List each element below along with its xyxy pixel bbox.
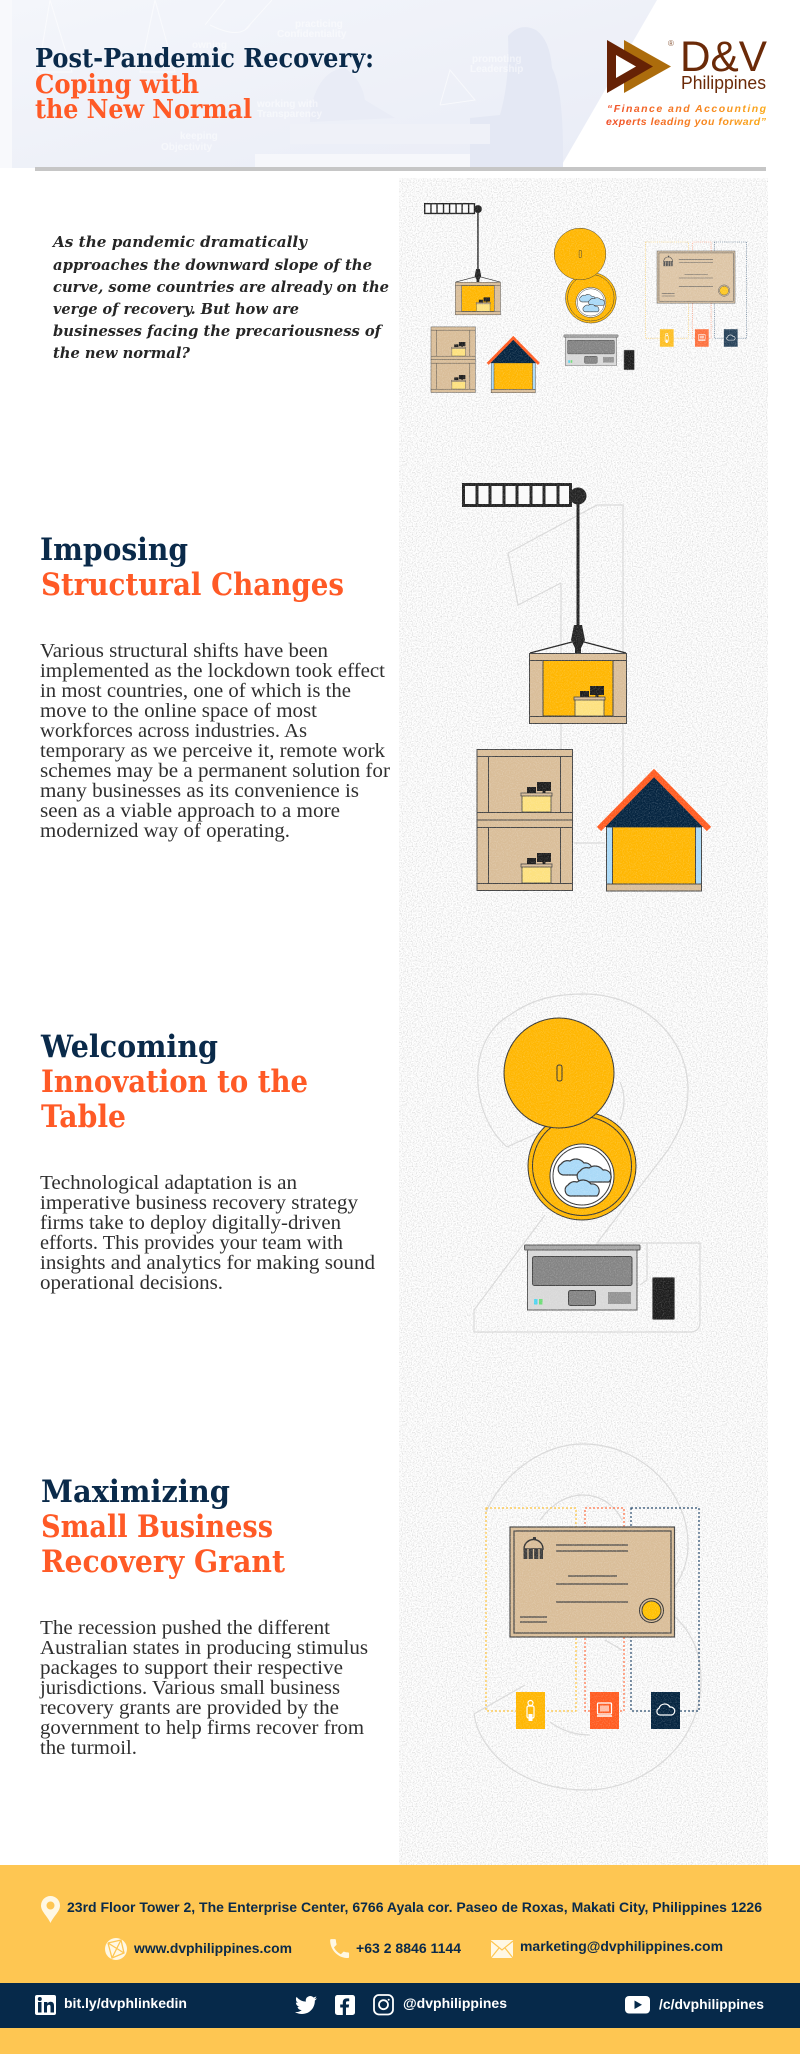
text block: recovery grant: government to help firms recover from [40, 1717, 364, 1739]
header background: Leadership [470, 64, 523, 75]
text block: innovation: imperative business recovery strategy [40, 1192, 358, 1214]
header background: keeping [180, 131, 218, 142]
icon: phone handset [330, 1939, 349, 1958]
ghost numeral 3 [474, 1444, 701, 1790]
footer website [105, 1938, 292, 1960]
heading: maximizing recovery grant: Small Business [41, 1509, 273, 1545]
text block: structural changes: temporary as we perceive it, remote work [40, 740, 385, 762]
heading: maximizing recovery grant [41, 1474, 286, 1580]
text block: structural changes: Various structural shifts have been [40, 640, 328, 662]
title [35, 44, 374, 125]
icon: instagram [374, 1995, 393, 2014]
heading: welcoming innovation: Welcoming [40, 1029, 218, 1065]
heading: imposing structural changes: Imposing [40, 532, 188, 568]
house [599, 773, 709, 891]
icon: location pin [41, 1896, 60, 1923]
header background: Objectivity [161, 142, 213, 153]
text block: structural changes: many businesses as its convenience is [40, 780, 359, 802]
intro text: the new normal? [53, 345, 190, 362]
heading: maximizing recovery grant: Recovery Grant [41, 1544, 286, 1580]
instagram: @dvphilippines [403, 1996, 507, 2011]
grain overlay on illustrations [399, 178, 768, 1865]
text block: recovery grant: packages to support their respective [40, 1657, 343, 1679]
icon: cloud tile [651, 1692, 680, 1729]
icon: linkedin [35, 1995, 56, 2015]
stacked office boxes [477, 750, 572, 890]
vault door open [504, 1018, 636, 1220]
text block: recovery grant [39, 1617, 368, 1759]
intro text: curve, some countries are already on the [53, 279, 389, 296]
text block: structural changes: implemented as the lockdown took effect [40, 660, 385, 682]
intro thumbnail: grant certificate [646, 242, 747, 347]
intro text: As the pandemic dramatically [51, 234, 309, 251]
footer address: 23rd Floor Tower 2, The Enterprise Center, 6766 Ayala cor. Paseo de Roxas, Makati City, Philippines 1226 [67, 1900, 762, 1915]
laptop [524, 1245, 640, 1310]
footer band [0, 1865, 800, 2054]
text block: structural changes: modernized way of operating. [40, 820, 290, 842]
linkedin [35, 1995, 187, 2015]
header background: promoting [472, 54, 521, 65]
text block: structural changes: move to the online space of most [40, 700, 317, 722]
text block: recovery grant: Australian states in producing stimulus [40, 1637, 368, 1659]
dashed link: navy [631, 1508, 699, 1711]
text block: structural changes: workforces across industries. As [40, 720, 307, 742]
text block: recovery grant: the turmoil. [40, 1737, 137, 1759]
dashed link: yellow [486, 1508, 576, 1711]
heading: welcoming innovation: Innovation to the [41, 1064, 308, 1100]
logo: D&V Philippines: ® [668, 39, 674, 48]
icon: globe [105, 1938, 127, 1960]
text block: innovation [40, 1172, 375, 1294]
icon: youtube [625, 1996, 650, 2014]
divider bar [35, 167, 766, 171]
heading: maximizing recovery grant: Maximizing [41, 1474, 230, 1510]
icon: twitter [295, 1996, 317, 2014]
logo: D&V Philippines: Philippines [681, 72, 766, 93]
ghost numeral 2 [474, 994, 700, 1332]
icon: person tile [516, 1692, 545, 1729]
text block: innovation: efforts. This provides your team with [40, 1232, 343, 1254]
heading: welcoming innovation: Table [41, 1099, 126, 1135]
text block: innovation: firms take to deploy digitally-driven [40, 1212, 341, 1234]
footer email: marketing@dvphilippines.com [520, 1939, 723, 1954]
text block: recovery grant: jurisdictions. Various small business [39, 1677, 340, 1699]
intro text [51, 234, 389, 362]
text block: innovation: operational decisions. [40, 1272, 223, 1294]
header background: Transparency [257, 109, 322, 120]
youtube [625, 1996, 764, 2014]
illustration: grant certificate with three funds [486, 1508, 699, 1729]
footer phone [330, 1939, 462, 1958]
hanging office box [530, 654, 626, 724]
illustration: vault with clouds and laptop [504, 1018, 674, 1320]
social band [0, 1983, 800, 2028]
ghost numeral 1 [508, 505, 623, 843]
intro text: verge of recovery. But how are [53, 301, 299, 318]
panel: textured illustration column [399, 178, 768, 1865]
certificate [510, 1527, 674, 1637]
icon: laptop tile [590, 1692, 619, 1729]
text block: innovation: Technological adaptation is an [40, 1172, 297, 1194]
text block: recovery grant: The recession pushed the different [40, 1617, 330, 1639]
instagram [374, 1995, 507, 2014]
heading: imposing structural changes: Structural Changes [41, 567, 344, 603]
header background: Confidentiality [277, 29, 347, 40]
icon: envelope [491, 1940, 513, 1958]
footer address [41, 1896, 762, 1923]
header background: working with [256, 99, 318, 110]
illustration: crane lifting office to house [464, 484, 709, 891]
crane arm [464, 484, 626, 653]
footer email [491, 1939, 723, 1958]
logo: D&V Philippines [606, 33, 767, 128]
heading: welcoming innovation [40, 1029, 308, 1135]
text block: structural changes: in most countries, one of which is the [40, 680, 351, 702]
logo: D&V Philippines: “Finance and Accounting [607, 103, 767, 115]
dashed link: orange [585, 1508, 624, 1711]
intro text: approaches the downward slope of the [53, 257, 372, 274]
youtube: /c/dvphilippines [659, 1997, 764, 2012]
logo: D&V Philippines: D&V [680, 33, 767, 81]
title: Post-Pandemic Recovery: [35, 44, 374, 74]
header background: practicing [295, 19, 343, 30]
title: the New Normal [35, 95, 252, 125]
text block: structural changes: seen as a viable approach to a more [40, 800, 340, 822]
logo: D&V Philippines: experts leading you forward” [606, 116, 767, 128]
header background [0, 0, 657, 168]
intro thumbnail: vault and laptop [554, 228, 634, 370]
linkedin: bit.ly/dvphlinkedin [64, 1996, 187, 2011]
icon: facebook [335, 1995, 355, 2015]
title: Coping with [35, 70, 199, 100]
text block: recovery grant: recovery grants are provided by the [40, 1697, 339, 1719]
text block: structural changes [40, 640, 390, 842]
text block: innovation: insights and analytics for making sound [40, 1252, 375, 1274]
text block: structural changes: schemes may be a permanent solution for [40, 760, 390, 782]
heading: imposing structural changes [40, 532, 344, 603]
footer website: www.dvphilippines.com [133, 1941, 292, 1956]
phone [652, 1278, 674, 1320]
intro text: businesses facing the precariousness of [53, 323, 384, 340]
footer phone: +63 2 8846 1144 [356, 1941, 462, 1956]
header background: owning [192, 40, 227, 51]
intro thumbnail: crane [425, 203, 539, 393]
